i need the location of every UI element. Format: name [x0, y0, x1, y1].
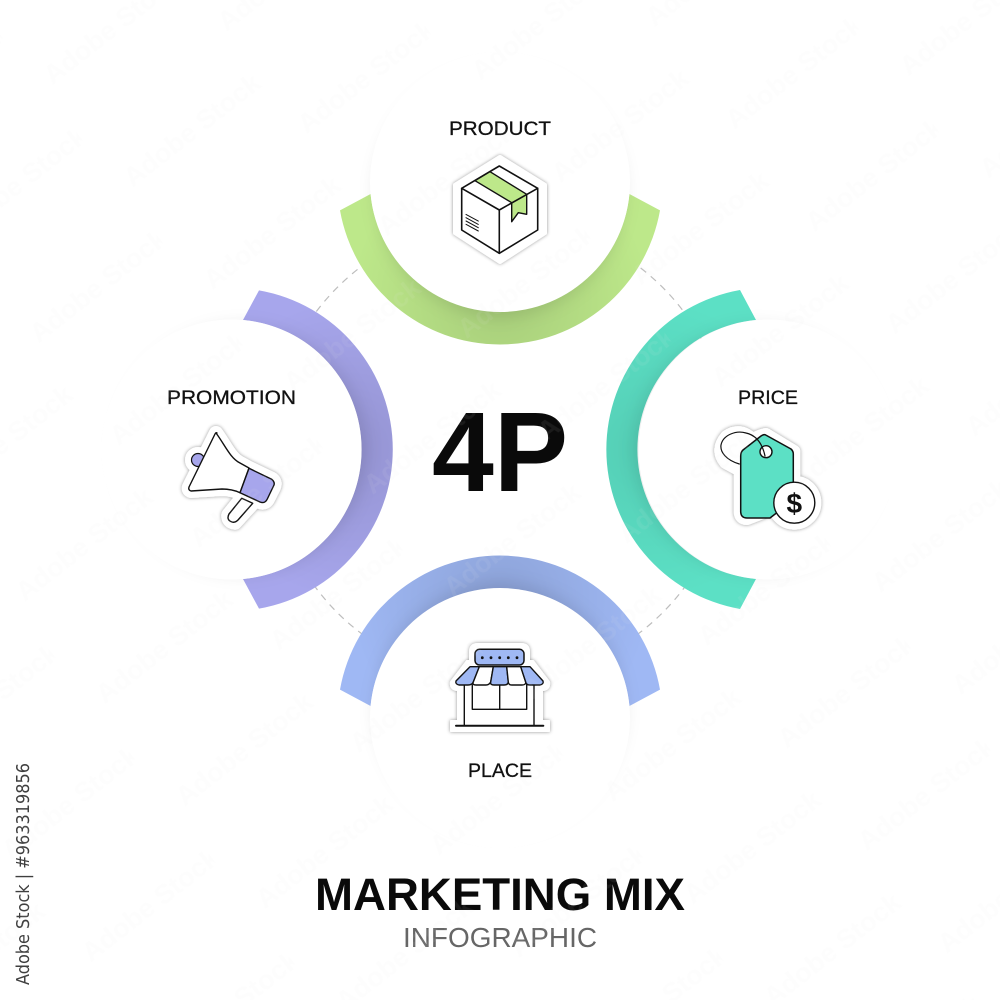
heading: PRODUCT: PRODUCT — [449, 118, 551, 140]
arc: price — [606, 290, 756, 609]
arc: place — [340, 555, 660, 706]
arc: product — [340, 194, 660, 345]
heading: PRICE: PRICE — [738, 387, 798, 409]
circle: place — [370, 583, 630, 848]
circle: product — [370, 52, 630, 317]
heading: PROMOTION: PROMOTION — [167, 387, 296, 409]
dashed connector ring — [270, 220, 730, 680]
circle: promotion — [102, 320, 366, 580]
arc: promotion — [243, 290, 393, 609]
circle: price — [634, 320, 898, 580]
stock id label: Adobe Stock | #963319856 — [13, 763, 34, 985]
icon: price tag: $ — [787, 488, 803, 519]
heading: PLACE: PLACE — [468, 760, 532, 782]
center label: 4P: 4P — [432, 389, 568, 515]
subtitle: INFOGRAPHIC: INFOGRAPHIC — [403, 922, 597, 953]
icon: product box — [455, 157, 545, 262]
icon: megaphone — [189, 433, 275, 523]
title: MARKETING MIX: MARKETING MIX — [315, 869, 685, 920]
icon: price tag — [721, 432, 815, 523]
icon: storefront — [451, 644, 549, 731]
